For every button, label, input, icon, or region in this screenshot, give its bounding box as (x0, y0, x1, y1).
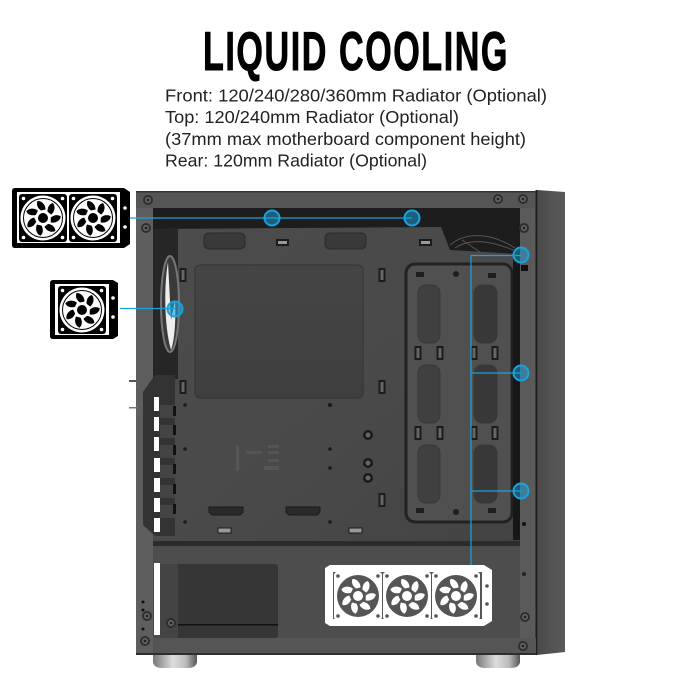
PSU opening (154, 563, 278, 638)
radiator specification text: (37mm max motherboard component height) (165, 129, 526, 149)
drive tray (406, 250, 520, 540)
radiator specification text (165, 86, 547, 170)
front panel (536, 190, 565, 655)
PSU shroud (153, 546, 520, 655)
top dark band (153, 208, 520, 254)
radiator specification text: Front: 120/240/280/360mm Radiator (Optional) (165, 86, 547, 106)
cables (450, 236, 518, 252)
motherboard window (195, 265, 363, 398)
case feet (153, 654, 520, 668)
bottom rail (136, 600, 536, 655)
case frame (136, 191, 537, 655)
shroud ledge (153, 541, 520, 546)
faint board markings (236, 445, 279, 471)
PC case (129, 190, 565, 668)
mounting slots (159, 243, 386, 507)
expansion slots (129, 375, 176, 536)
top frame (136, 191, 535, 208)
callout: rear radiator position (120, 302, 182, 316)
icon: dual-fan radiator (top) (12, 188, 130, 248)
interior back panel (153, 208, 520, 543)
right frame column (519, 208, 535, 655)
rear exhaust fan (153, 229, 179, 379)
callout: front radiator positions (471, 248, 528, 565)
radiator specification text: Rear: 120mm Radiator (Optional) (165, 150, 427, 170)
lower motherboard slots (209, 507, 362, 533)
radiator specification text: Top: 120/240mm Radiator (Optional) (165, 107, 459, 127)
callout: top radiator positions (130, 210, 420, 226)
top mount cut-outs (204, 233, 366, 249)
standoffs (183, 403, 373, 524)
left frame column (136, 208, 153, 655)
icon: single-fan radiator (rear) (50, 280, 118, 339)
icon: triple-fan radiator (front) (325, 565, 492, 626)
title: LIQUID COOLING (203, 20, 509, 82)
